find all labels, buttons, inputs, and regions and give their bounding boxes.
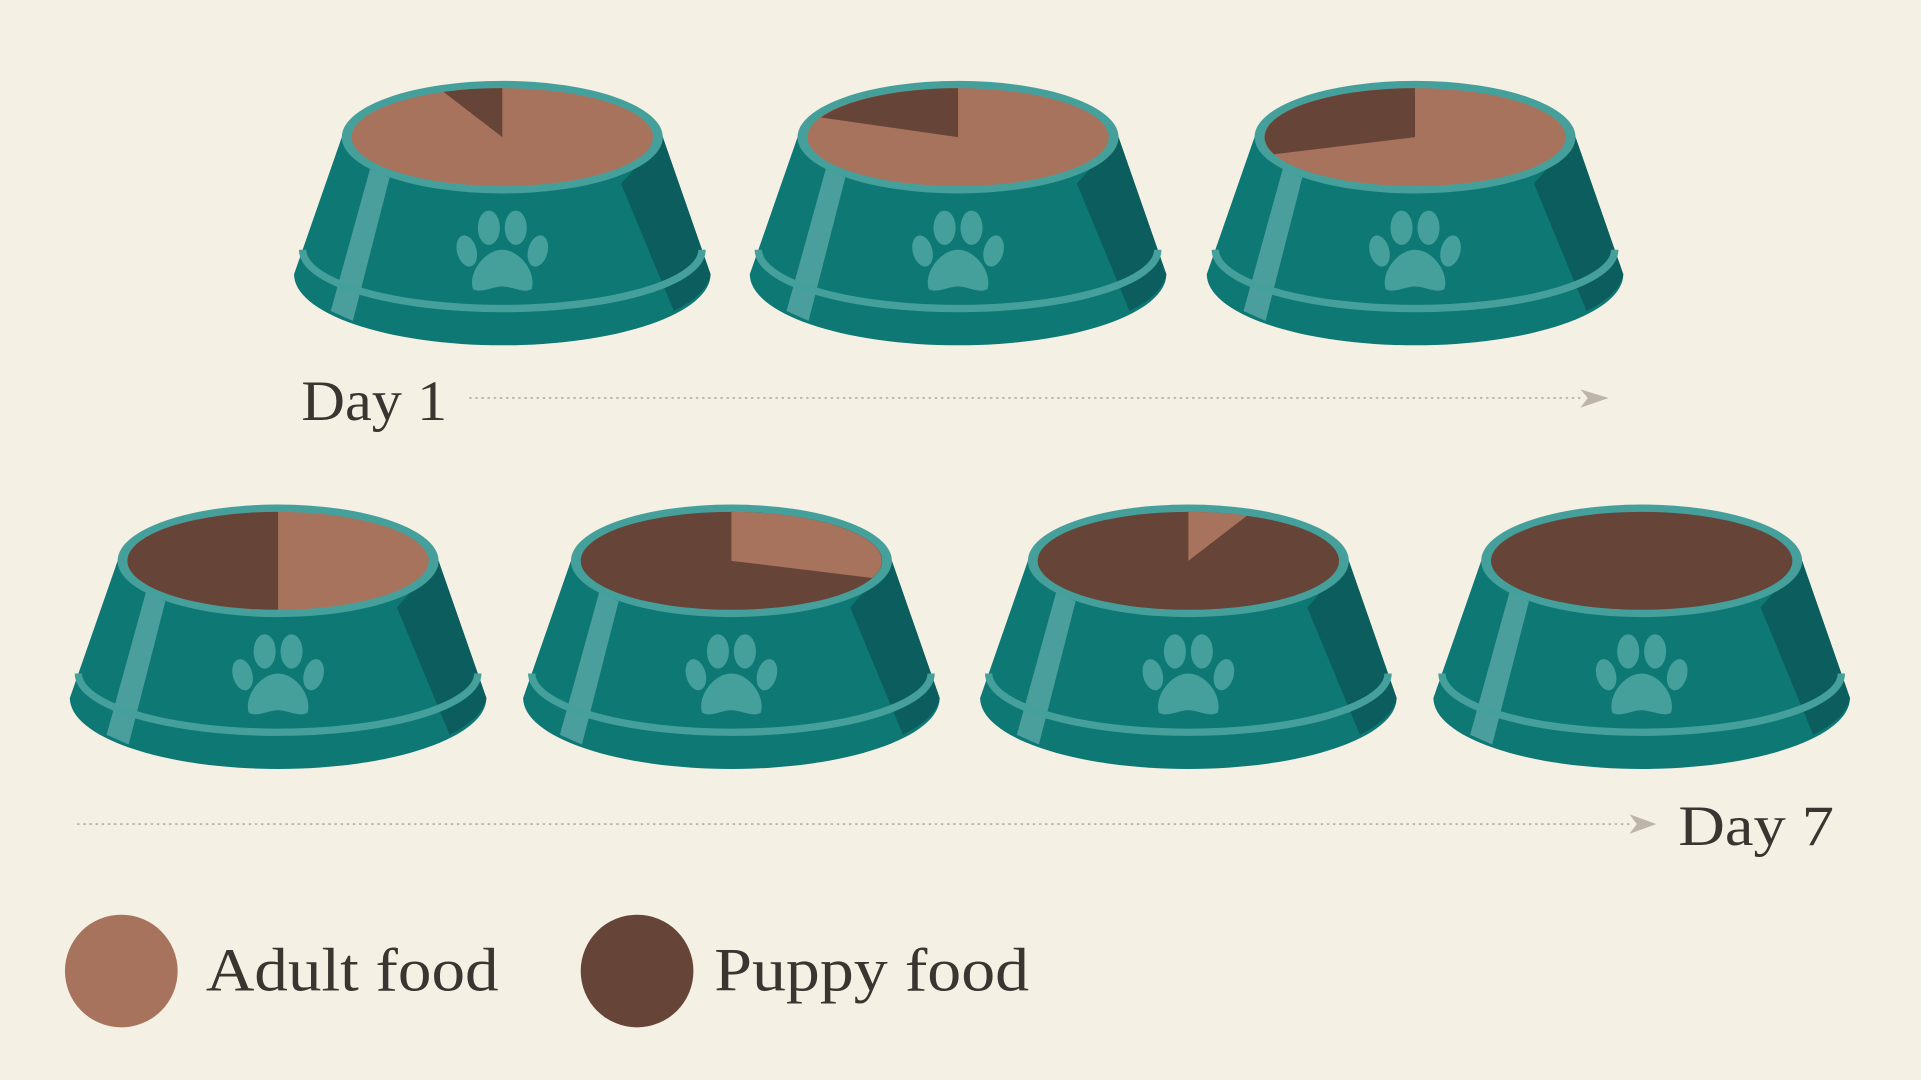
arrow: timeline row 2 bbox=[77, 814, 1656, 834]
arrow: timeline row 1 bbox=[469, 389, 1609, 408]
bowl day 1 bbox=[294, 81, 711, 345]
label: Day 1: Day 1 bbox=[301, 370, 447, 433]
bowl day 3 bbox=[1207, 81, 1623, 345]
legend: puppy food bbox=[581, 915, 1029, 1027]
bowl day 4 bbox=[70, 504, 486, 769]
bowl day 7 bbox=[1433, 504, 1850, 769]
legend: adult food bbox=[65, 915, 499, 1027]
bowl day 2 bbox=[750, 81, 1166, 345]
label: Day 7: Day 7 bbox=[1678, 795, 1834, 858]
legend: adult food: Adult food bbox=[206, 937, 499, 1005]
legend: puppy food: Puppy food bbox=[714, 937, 1029, 1005]
bowl day 5 bbox=[523, 504, 940, 769]
bowl day 6 bbox=[980, 504, 1397, 769]
